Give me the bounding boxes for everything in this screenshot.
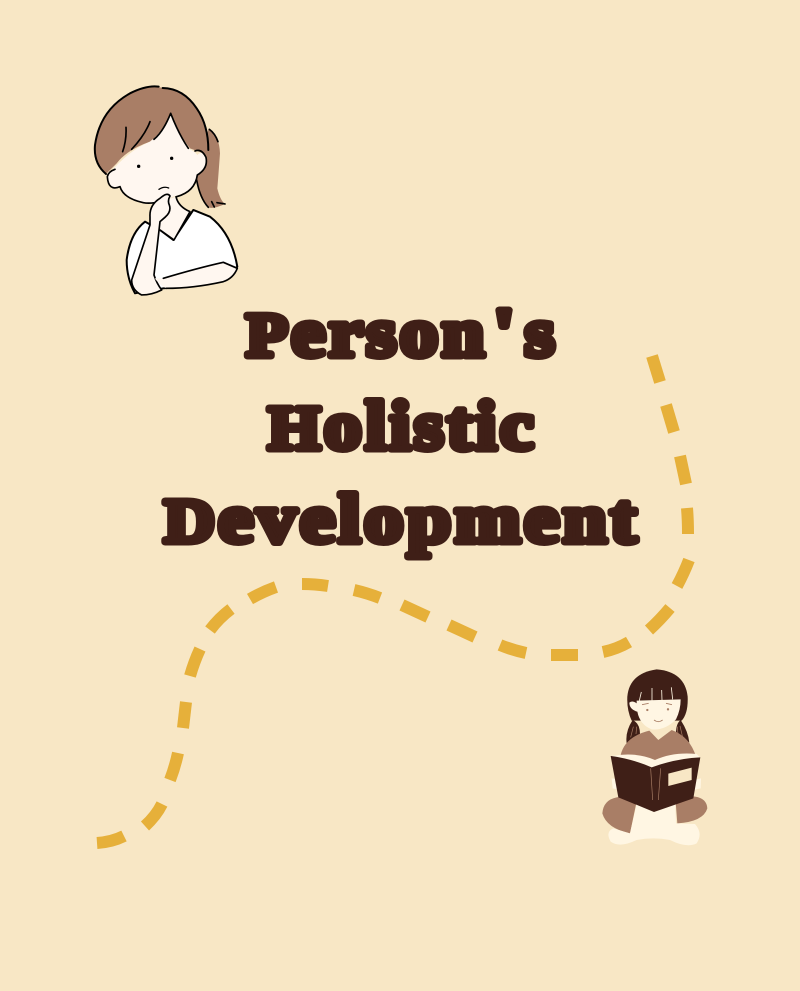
hair bbox=[627, 669, 688, 721]
pigtails bbox=[626, 720, 689, 743]
pigtail highlights bbox=[631, 726, 683, 737]
book pages bbox=[612, 753, 700, 767]
torso bbox=[621, 730, 696, 763]
book label bbox=[668, 768, 692, 786]
title bbox=[164, 295, 640, 558]
dashed path arrow bbox=[97, 356, 689, 843]
face outline bbox=[107, 113, 206, 203]
hair outline bbox=[95, 86, 208, 174]
hands bbox=[612, 778, 701, 790]
legs bbox=[602, 793, 707, 833]
forearm and hand bbox=[132, 194, 170, 295]
hair bbox=[95, 87, 208, 174]
hair strands bbox=[123, 122, 150, 152]
book bbox=[611, 756, 700, 812]
ponytail bbox=[197, 129, 225, 208]
face details bbox=[642, 703, 672, 722]
feet and lower body bbox=[608, 797, 700, 845]
face bbox=[629, 699, 681, 729]
neck bbox=[157, 197, 190, 240]
book spine lines bbox=[651, 768, 661, 800]
eyes and mouth bbox=[137, 165, 140, 168]
title: Person 's bbox=[246, 295, 558, 372]
title: Development bbox=[164, 481, 640, 558]
face bbox=[107, 113, 206, 203]
fringe highlights bbox=[639, 687, 673, 701]
icon: thinking girl bbox=[95, 86, 237, 295]
title: Holistic bbox=[268, 388, 537, 465]
icon: girl reading a book bbox=[602, 669, 707, 845]
shirt body bbox=[127, 210, 237, 293]
folded arm bbox=[155, 262, 237, 288]
